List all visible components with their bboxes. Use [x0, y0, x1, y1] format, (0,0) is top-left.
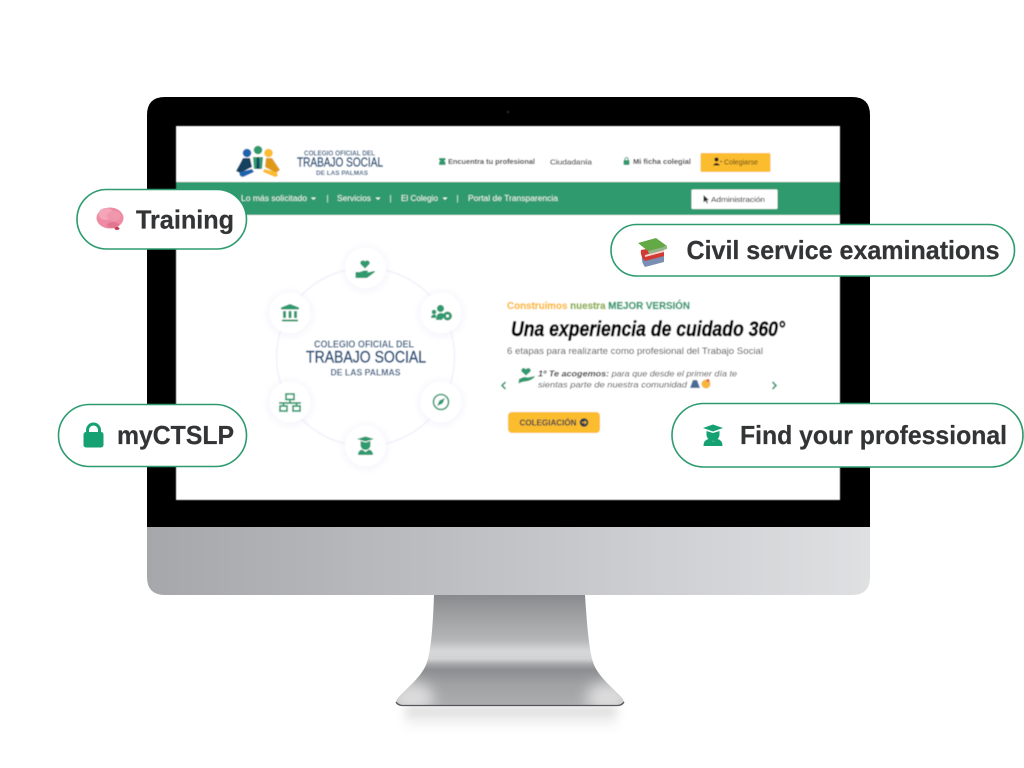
admin button: Administración: [711, 195, 765, 204]
pill: Training: [77, 190, 246, 249]
join button: Colegiarse: [724, 158, 758, 166]
circular diagram: [270, 248, 462, 466]
label: Training: [136, 204, 234, 234]
site logo: [236, 146, 280, 177]
monitor silver chin: [147, 527, 870, 595]
nav items: |: [456, 194, 459, 203]
center text: [306, 340, 426, 378]
website screenshot screen: [176, 126, 840, 500]
site logo wordmark: TRABAJO SOCIAL: [297, 156, 383, 170]
icon: lock: [84, 424, 104, 448]
nav items: El Colegio: [401, 194, 439, 203]
admin button: [692, 190, 778, 209]
site logo wordmark: DE LAS PALMAS: [316, 170, 369, 177]
nav items: Lo más solicitado: [241, 194, 308, 203]
site logo wordmark: [297, 150, 383, 177]
top link: find a professional: Encuentra tu profesional: [448, 157, 535, 166]
label: Civil service examinations: [686, 235, 1000, 265]
monitor: [147, 97, 870, 731]
icon: books: [638, 238, 667, 267]
top link: citizens: Ciudadanía: [550, 158, 593, 166]
center text: TRABAJO SOCIAL: [306, 348, 426, 366]
nav items: [241, 194, 559, 203]
node: team settings: [420, 292, 462, 334]
carousel arrow left: [502, 382, 506, 389]
center text: COLEGIO OFICIAL DEL: [314, 340, 414, 350]
icon: brain: [96, 208, 124, 230]
icon: graduate: [703, 424, 723, 446]
carousel arrow right: [772, 382, 776, 389]
nav items: Portal de Transparencia: [468, 194, 559, 203]
nav items: |: [326, 194, 329, 203]
label: myCTSLP: [117, 420, 234, 450]
carousel slide: 1º Te acogemos: para que desde el primer día te: [538, 368, 737, 378]
top link: my file: Mi ficha colegial: [633, 157, 691, 166]
tagline: Construimos nuestra MEJOR VERSIÓN: [507, 299, 690, 312]
pill: Civil service examinations: [611, 224, 1014, 276]
label: Find your professional: [740, 420, 1007, 450]
hero heading: Una experiencia de cuidado 360°: [511, 318, 786, 341]
join button: [700, 153, 770, 172]
membership button: COLEGIACIÓN: [520, 416, 576, 428]
nav items: |: [390, 194, 392, 203]
node: network: [270, 382, 310, 422]
center text: DE LAS PALMAS: [330, 368, 400, 378]
nav items: Servicios: [337, 194, 371, 203]
pill: Find your professional: [672, 404, 1023, 467]
node: compass: [420, 382, 462, 422]
carousel slide: [518, 368, 737, 390]
node: graduate: [345, 426, 386, 466]
monitor stand shadow: [405, 707, 617, 731]
site logo wordmark: COLEGIO OFICIAL DEL: [304, 150, 376, 158]
node: care hand: [345, 248, 386, 288]
monitor black bezel: [147, 97, 870, 527]
membership button: [508, 412, 600, 433]
monitor stand: [396, 595, 624, 706]
node: institution: [270, 292, 310, 334]
camera: [506, 110, 510, 114]
hero subheading: 6 etapas para realizarte como profesional del Trabajo Social: [507, 346, 763, 357]
navigation bar: [176, 182, 840, 215]
pill: myCTSLP: [58, 404, 246, 466]
hero copy: [502, 299, 786, 433]
carousel slide: sientas parte de nuestra comunidad: [538, 380, 687, 390]
